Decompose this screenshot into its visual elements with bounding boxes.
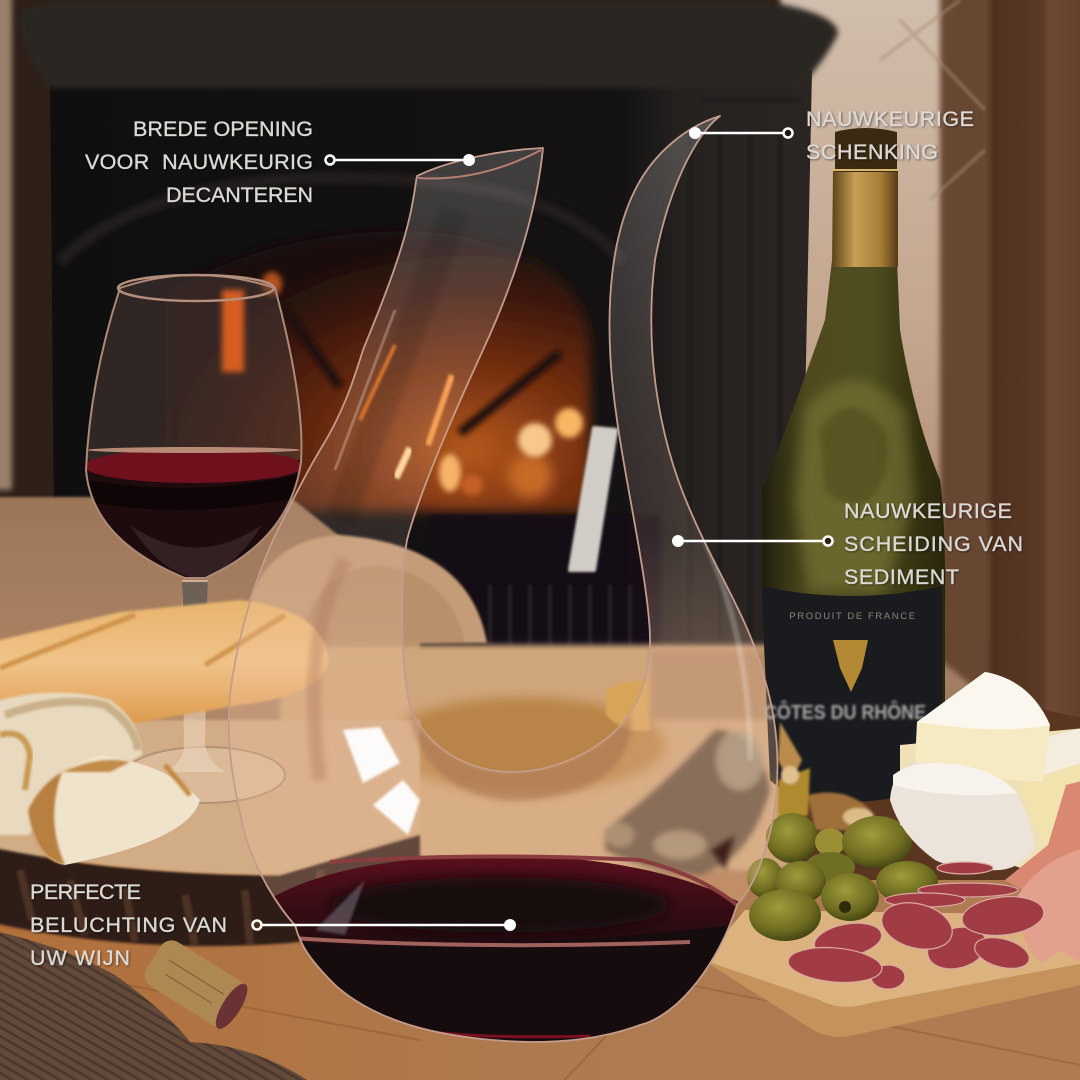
cloth [0, 930, 322, 1080]
callout: perfecte beluchting: BELUCHTING VAN [30, 913, 227, 937]
callout: perfecte beluchting [30, 880, 516, 970]
salami slices [787, 862, 1046, 989]
tree-slice board [0, 720, 420, 946]
rounded wooden board rim behind decanter [240, 535, 487, 645]
callout: brede opening: BREDE OPENING [133, 117, 313, 141]
callout: brede opening: VOOR NAUWKEURIG [85, 150, 313, 174]
olives [747, 813, 938, 941]
decanter wine [260, 855, 745, 1050]
nuts and glass dish [778, 722, 875, 830]
bottle label: CÔTES DU RHÔNE [764, 700, 926, 724]
callout: nauwkeurige schenking: SCHENKING [806, 140, 938, 164]
fire reflections [335, 310, 395, 470]
callout: brede opening [85, 117, 475, 207]
decanter [229, 116, 777, 1050]
wine bottle [762, 128, 945, 802]
wine glass [85, 274, 302, 804]
bottle label: PRODUIT DE FRANCE [789, 611, 917, 622]
wooden tray behind decanter [280, 645, 790, 870]
callout: nauwkeurige schenking: NAUWKEURIGE [806, 107, 974, 131]
cutting board [703, 910, 1080, 1037]
callout: perfecte beluchting: UW WIJN [30, 946, 130, 970]
bottle label [762, 586, 942, 802]
decanter outline [229, 116, 777, 1042]
prosciutto [1005, 780, 1080, 965]
icon: grape emblem [833, 640, 868, 692]
table surface [0, 497, 1080, 1080]
callout: scheiding van sediment: SEDIMENT [844, 565, 959, 589]
stove [18, 2, 838, 650]
cork [140, 935, 253, 1033]
background: wall and wooden post [0, 0, 1080, 740]
bread: baguette and slices [0, 600, 328, 865]
stove fire window [165, 231, 590, 512]
callout: nauwkeurige schenking [689, 107, 974, 164]
white reflections [343, 727, 400, 783]
callout: brede opening: DECANTEREN [166, 183, 313, 207]
bottle gold foil [832, 128, 898, 267]
callout: scheiding van sediment: SCHEIDING VAN [844, 532, 1023, 556]
cheese [890, 672, 1080, 875]
nuts seen through glass [605, 730, 770, 875]
callout: perfecte beluchting: PERFECTE [30, 880, 141, 904]
decanter glass body [229, 116, 777, 1042]
callout: scheiding van sediment [672, 499, 1023, 589]
callout: scheiding van sediment: NAUWKEURIGE [844, 499, 1012, 523]
